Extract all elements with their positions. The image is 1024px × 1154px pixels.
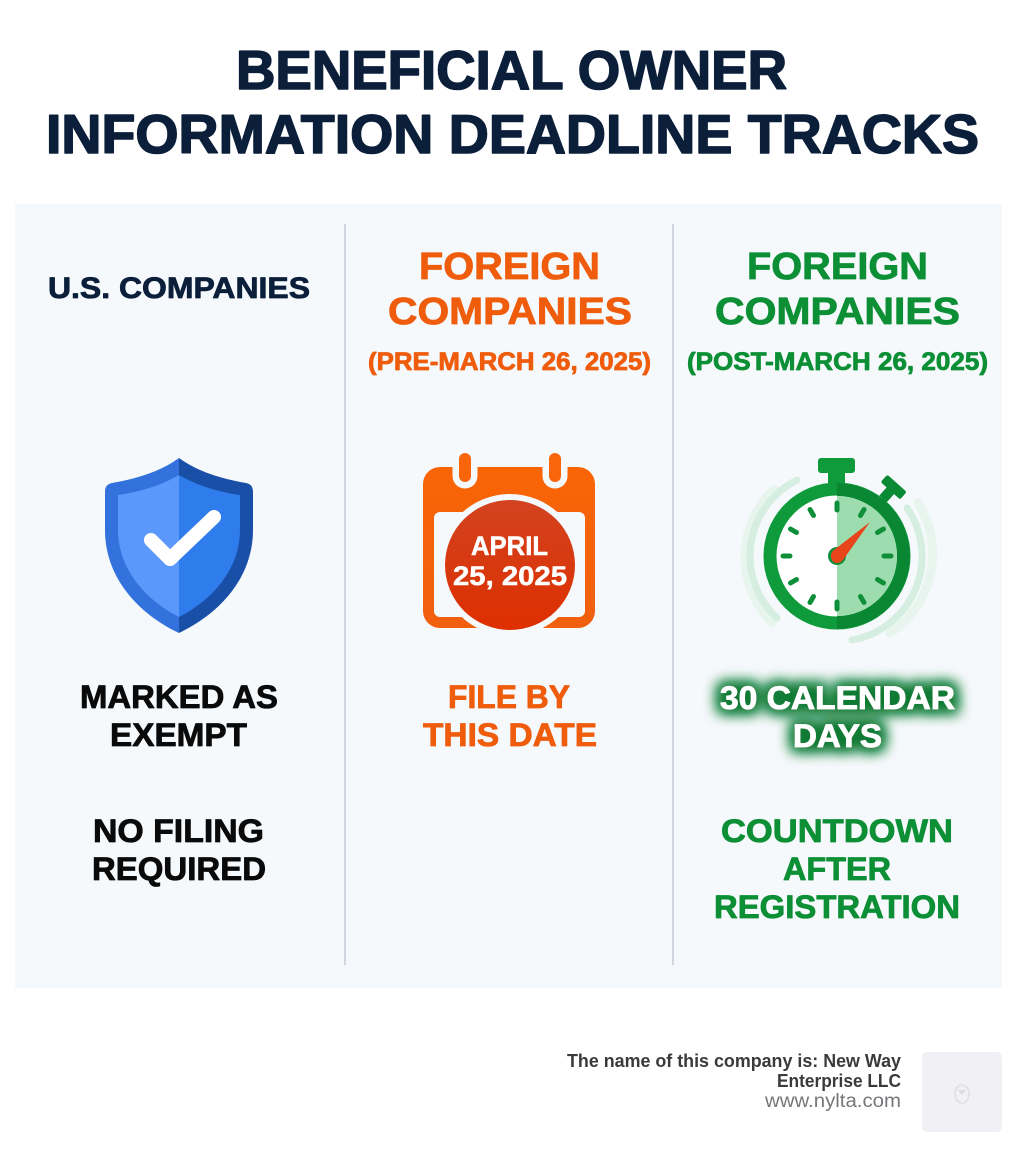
text: file by this date: FILE BY	[448, 679, 570, 715]
heading: foreign companies pre-March	[368, 246, 651, 376]
footer: company name and website: www.nylta.com	[764, 1091, 901, 1112]
text: marked as exempt: MARKED AS	[80, 679, 278, 715]
text: no filing required: NO FILING	[93, 813, 264, 849]
title: BENEFICIAL OWNER	[236, 39, 787, 101]
heading: foreign companies pre-March: COMPANIES	[388, 291, 632, 333]
text: countdown after registration: REGISTRATION	[714, 889, 960, 925]
title: INFORMATION DEADLINE TRACKS	[46, 103, 979, 165]
panel: deadline tracks background	[15, 204, 1002, 988]
text: marked as exempt: EXEMPT	[110, 717, 247, 753]
text: no filing required	[92, 813, 266, 887]
text: countdown after registration	[714, 813, 960, 925]
heading: foreign companies pre-March: FOREIGN	[419, 246, 600, 288]
footer: company name and website: The name of this company is: New Way	[567, 1051, 901, 1071]
heading: foreign companies post-March: (POST-MARCH 26, 2025)	[687, 348, 988, 376]
text: 30 calendar days with green glow: 30 CALENDAR	[720, 680, 955, 716]
heading: foreign companies pre-March: (PRE-MARCH 26, 2025)	[368, 348, 651, 376]
icon: calendar with April 25, 2025: 25, 2025	[453, 561, 567, 591]
column: foreign companies after March 26, 2025	[687, 246, 988, 925]
text: marked as exempt	[80, 679, 278, 753]
icon: calendar with April 25, 2025: APRIL	[471, 531, 548, 561]
heading: foreign companies post-March: FOREIGN	[747, 246, 928, 288]
text: 30 calendar days with green glow	[720, 680, 955, 754]
text: countdown after registration: COUNTDOWN	[721, 813, 953, 849]
column: U.S. companies	[48, 272, 310, 887]
text: countdown after registration: AFTER	[783, 851, 891, 887]
footer: company name and website	[567, 1051, 901, 1112]
icon: calendar with April 25, 2025	[411, 440, 609, 636]
text: no filing required: REQUIRED	[92, 851, 266, 887]
footer: company name and website: Enterprise LLC	[777, 1071, 901, 1091]
text: file by this date: THIS DATE	[423, 717, 597, 753]
text: file by this date	[423, 679, 597, 753]
title	[46, 39, 979, 165]
icon: shield with check mark	[105, 458, 253, 633]
heading: foreign companies post-March	[687, 246, 988, 376]
heading: foreign companies post-March: COMPANIES	[715, 291, 960, 333]
icon: stopwatch	[746, 458, 933, 640]
text: 30 calendar days with green glow: DAYS	[793, 718, 882, 754]
heading: U.S. companies: U.S. COMPANIES	[48, 272, 310, 305]
column: foreign companies before March 26, 2025	[368, 246, 651, 753]
footer logo placeholder	[922, 1052, 1002, 1132]
